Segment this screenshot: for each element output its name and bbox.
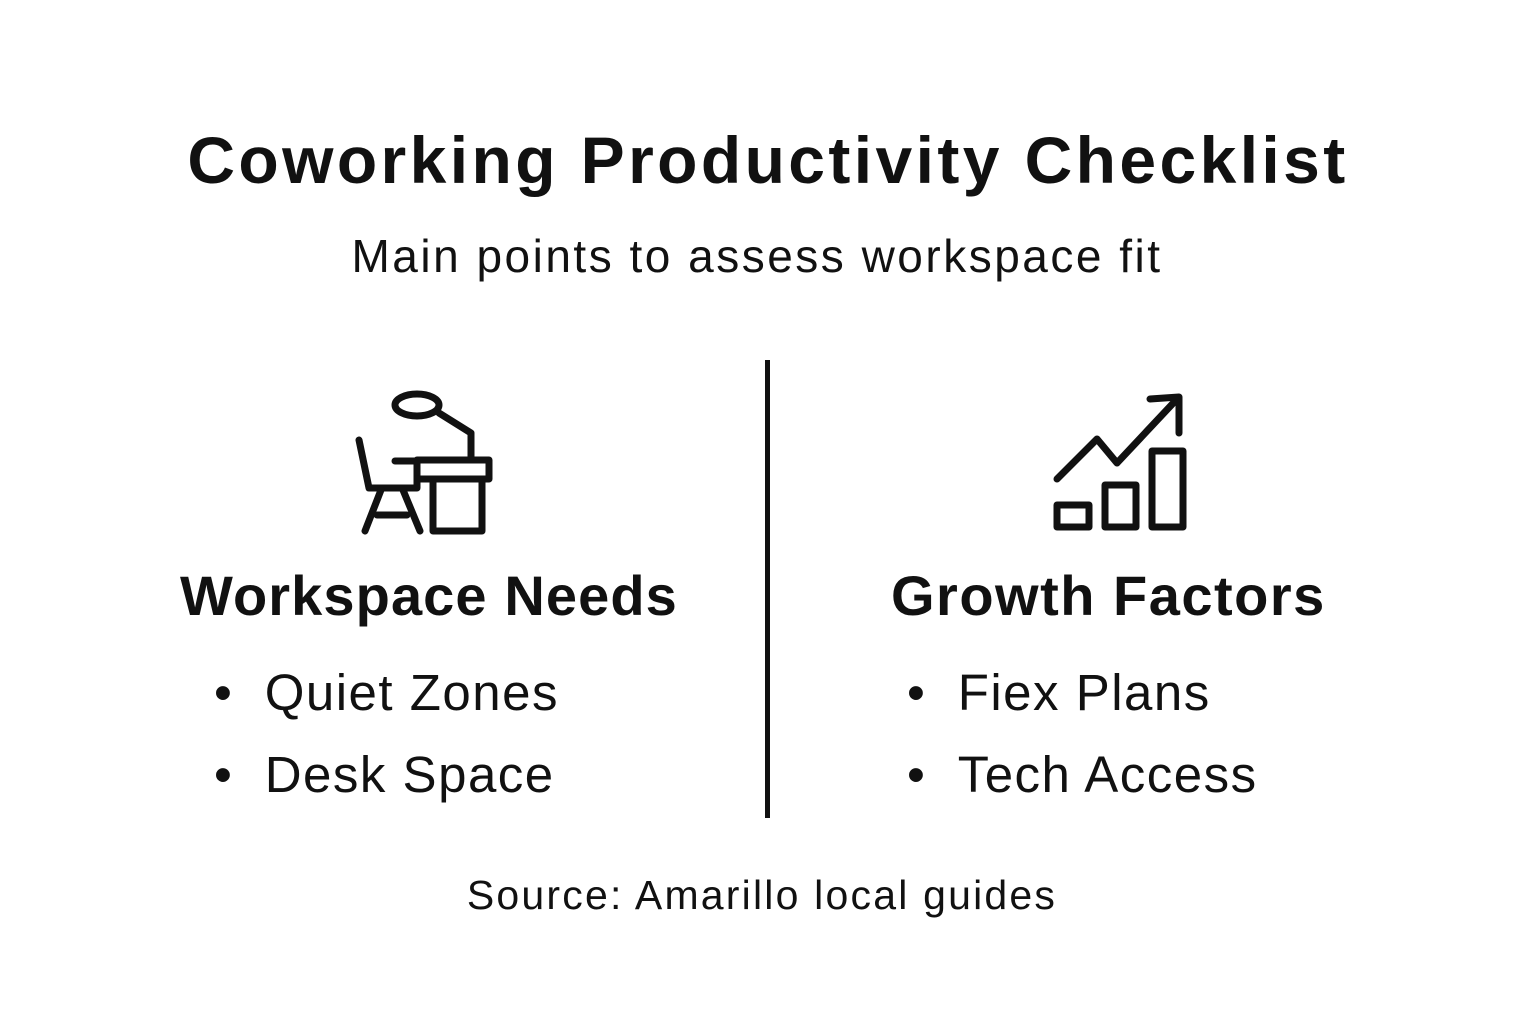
subtitle: Main points to assess workspace fit <box>351 230 1163 282</box>
heading: Workspace Needs: Workspace Needs <box>180 564 678 627</box>
list: workspace needs <box>214 664 559 803</box>
list: growth factors: • Fiex Plans <box>907 664 1211 721</box>
divider <box>765 360 770 818</box>
title: Coworking Productivity Checklist <box>187 123 1349 197</box>
list: workspace needs: • Desk Space <box>214 746 555 803</box>
list: workspace needs: • Quiet Zones <box>214 664 559 721</box>
heading: Growth Factors: Growth Factors <box>891 564 1326 627</box>
source: Source: Amarillo local guides <box>467 872 1057 918</box>
list: growth factors <box>907 664 1258 803</box>
list: growth factors: • Tech Access <box>907 746 1258 803</box>
